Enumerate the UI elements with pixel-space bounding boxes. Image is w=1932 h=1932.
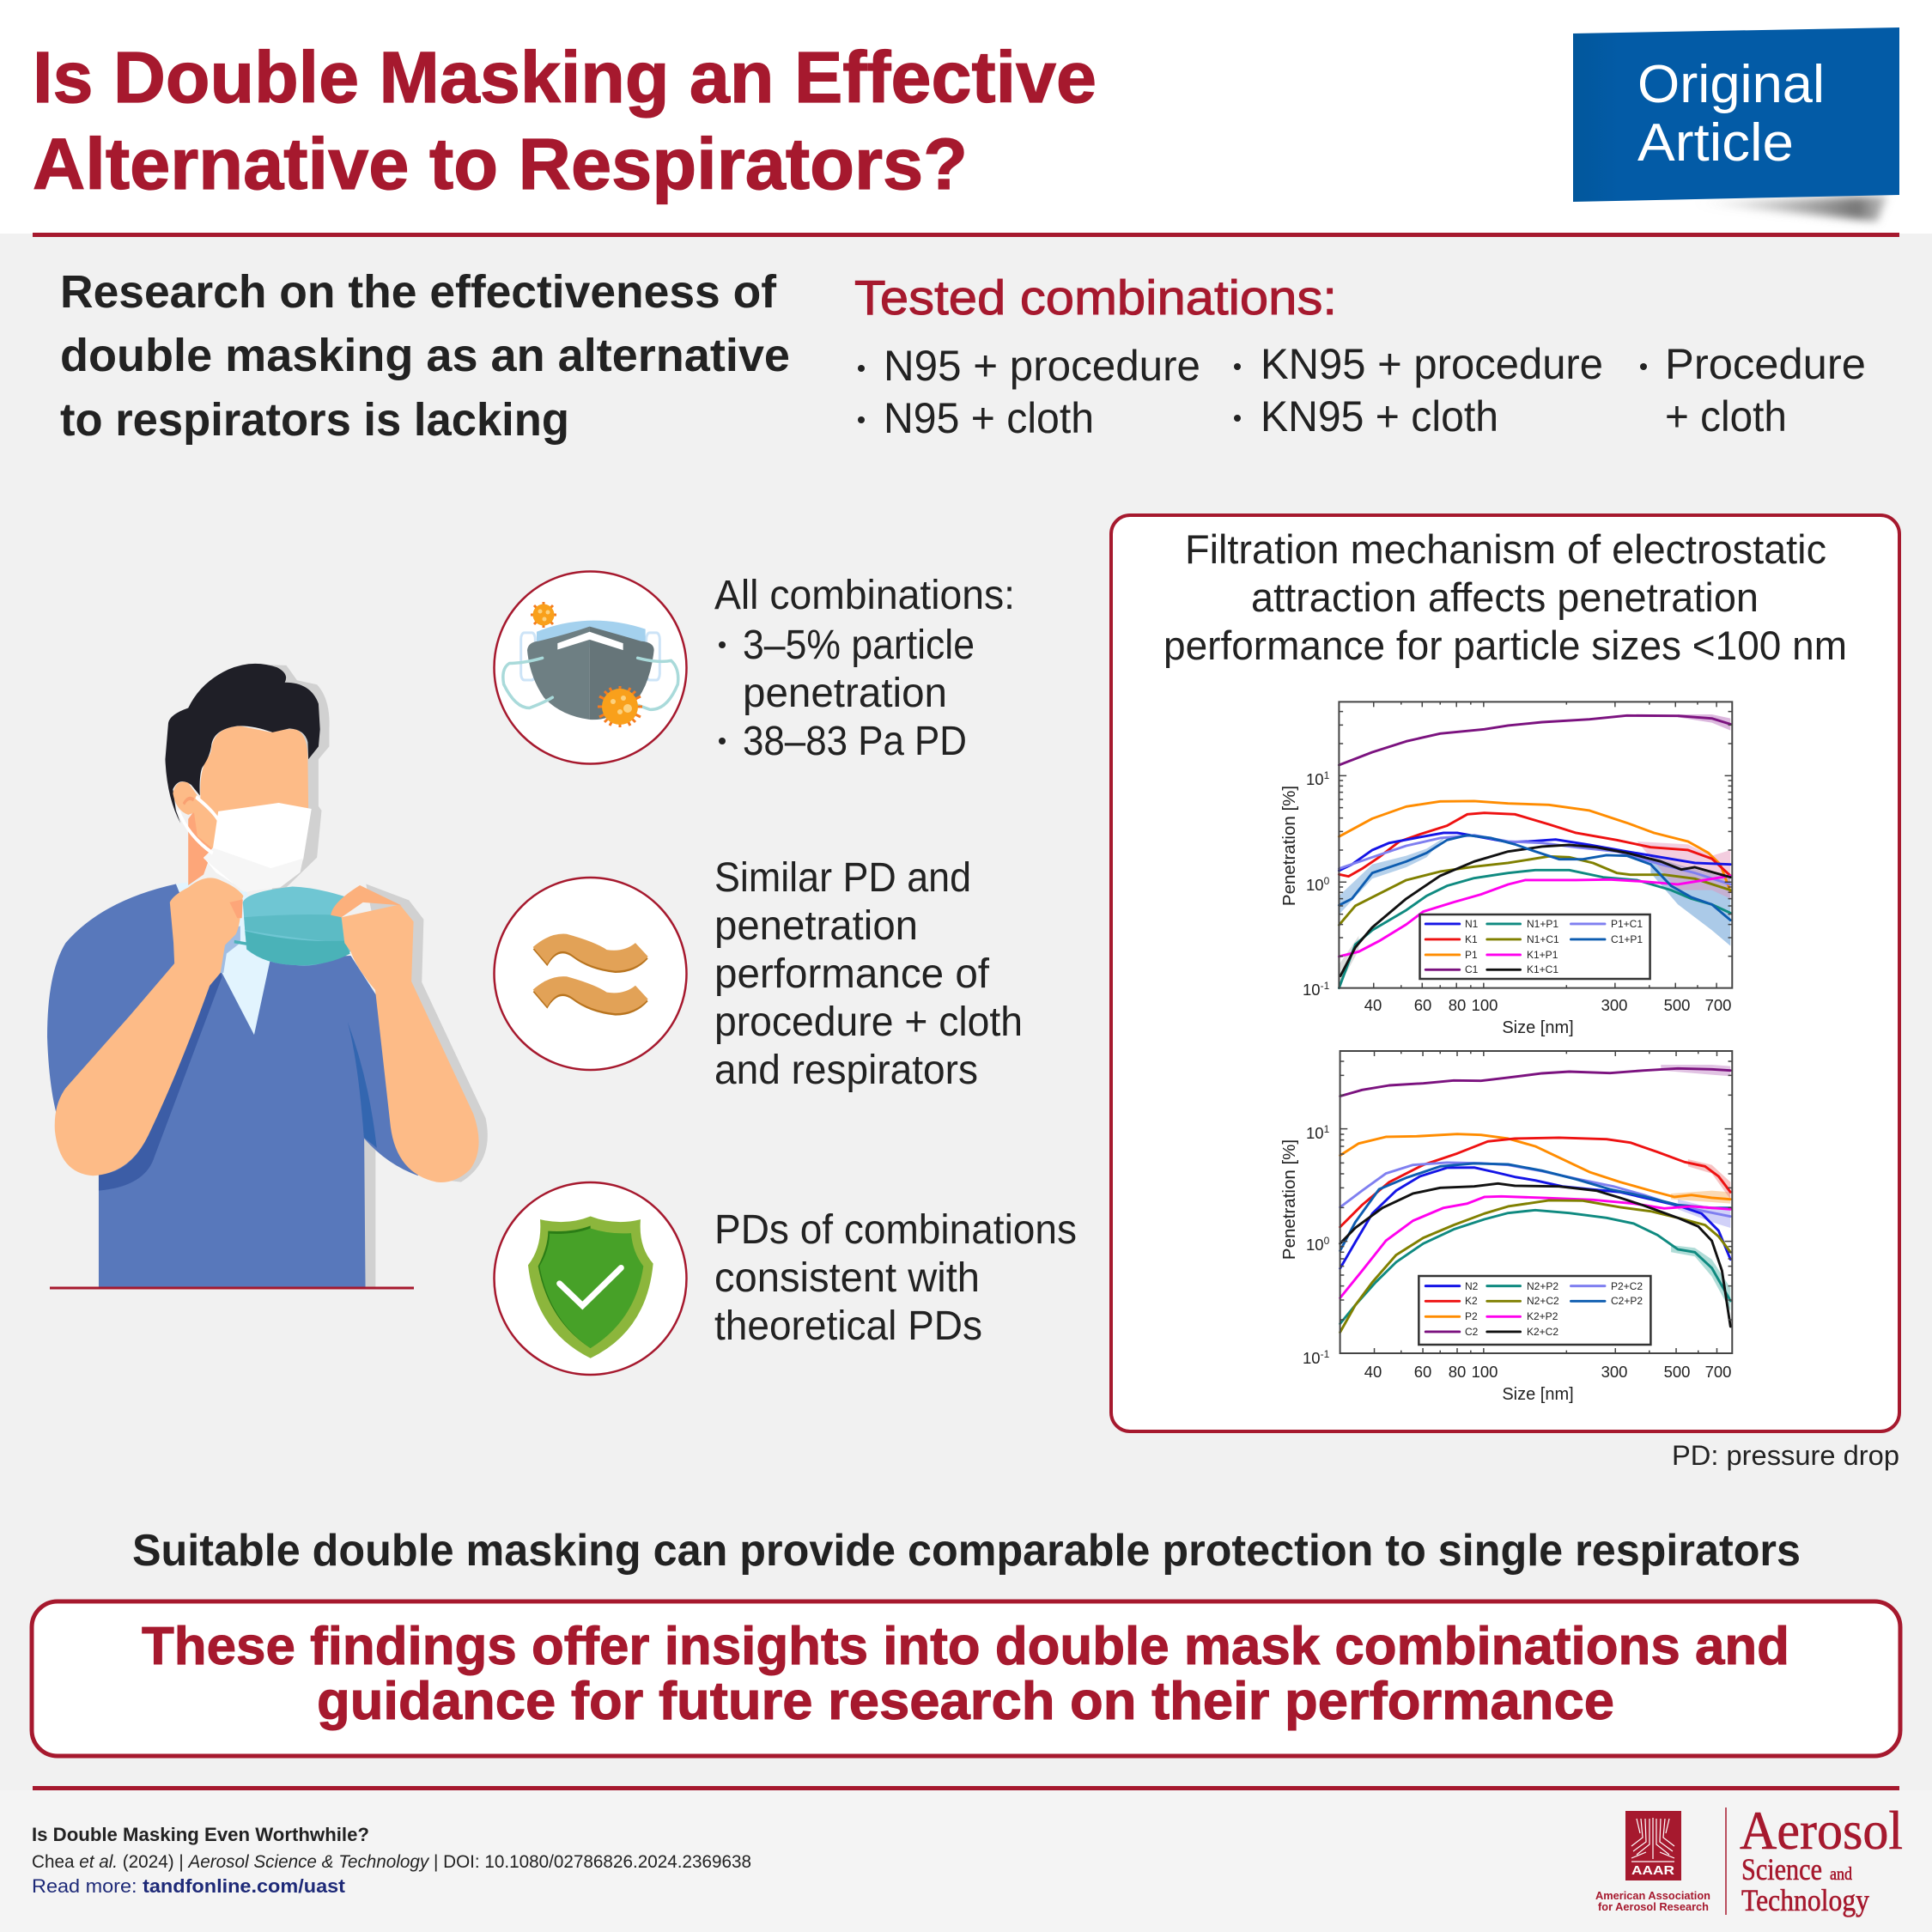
logo: Aerosol Science and Technology bbox=[1740, 1800, 1903, 1917]
list: tested combinations: KN95 + cloth bbox=[1261, 392, 1498, 440]
citation bbox=[32, 1824, 751, 1897]
chart: penetration vs size, set 2: 1 bbox=[1324, 1123, 1330, 1135]
list: tested combinations: N95 + cloth bbox=[884, 394, 1094, 442]
icon: approximately equal bbox=[495, 878, 687, 1070]
chart: penetration vs size, set 1: N1+P1 bbox=[1527, 918, 1558, 930]
panel heading: performance for particle sizes <100 nm bbox=[1163, 623, 1847, 668]
chart: penetration vs size, set 1: 10 bbox=[1306, 770, 1324, 788]
chart: penetration vs size, set 1: 10 bbox=[1303, 981, 1321, 999]
chart: penetration vs size, set 1: 60 bbox=[1414, 996, 1431, 1014]
chart: penetration vs size, set 2: 700 bbox=[1705, 1363, 1731, 1381]
panel heading: Filtration mechanism of electrostatic bbox=[1185, 526, 1826, 572]
chart: penetration vs size, set 1: 1 bbox=[1324, 769, 1330, 781]
citation: Read more: tandfonline.com/uast bbox=[32, 1875, 346, 1897]
icon: shield with check bbox=[495, 1182, 687, 1375]
badge: original article bbox=[1573, 27, 1899, 222]
text: pressure drops bbox=[714, 1207, 1077, 1349]
footnote: abbreviation: PD: pressure drop bbox=[1672, 1440, 1899, 1471]
title: Is Double Masking an Effective bbox=[33, 37, 1097, 118]
text: research gap: to respirators is lacking bbox=[60, 394, 569, 446]
text: pressure drops: PDs of combinations bbox=[714, 1207, 1077, 1253]
citation: Chea et al. (2024) | Aerosol Science & Technology | DOI: 10.1080/02786826.2024.2369638 bbox=[32, 1852, 751, 1872]
chart: penetration vs size, set 1: 500 bbox=[1664, 996, 1690, 1014]
list: tested combinations: N95 + procedure bbox=[884, 342, 1200, 390]
chart: penetration vs size, set 2 bbox=[1279, 1051, 1732, 1404]
chart: penetration vs size, set 1: 300 bbox=[1601, 996, 1627, 1014]
title: Alternative to Respirators? bbox=[33, 124, 968, 204]
text: research gap bbox=[60, 266, 790, 446]
icon: mask with viruses bbox=[495, 572, 687, 764]
chart: penetration vs size, set 2: N2+P2 bbox=[1527, 1280, 1558, 1292]
text: similar performance bbox=[714, 855, 1023, 1093]
chart: penetration vs size, set 1: K1 bbox=[1465, 933, 1478, 945]
chart: penetration vs size, set 1: 0 bbox=[1324, 875, 1330, 887]
chart: penetration vs size, set 1: Size [nm] bbox=[1502, 1018, 1574, 1037]
panel heading bbox=[1163, 526, 1847, 668]
callout: conclusion bbox=[32, 1601, 1900, 1756]
chart: penetration vs size, set 1: K1+C1 bbox=[1527, 963, 1558, 975]
text: research gap: Research on the effectiveness of bbox=[60, 266, 777, 318]
chart: penetration vs size, set 1: C1+P1 bbox=[1611, 933, 1643, 945]
text: similar performance: procedure + cloth bbox=[714, 999, 1023, 1045]
chart: penetration vs size, set 2: 60 bbox=[1414, 1363, 1431, 1381]
text: all combinations: All combinations: bbox=[714, 573, 1015, 618]
chart: penetration vs size, set 2: 80 bbox=[1449, 1363, 1466, 1381]
list: tested combinations: KN95 + procedure bbox=[1261, 340, 1603, 388]
logo: AAAR bbox=[1595, 1811, 1710, 1913]
chart: penetration vs size, set 2: C2+P2 bbox=[1611, 1295, 1643, 1307]
text: similar performance: performance of bbox=[714, 951, 990, 997]
text: all combinations: 3–5% particle bbox=[743, 623, 975, 668]
chart: penetration vs size, set 2: 500 bbox=[1664, 1363, 1690, 1381]
chart: penetration vs size, set 2: 0 bbox=[1324, 1235, 1330, 1247]
chart: penetration vs size, set 1: P1 bbox=[1465, 949, 1478, 961]
chart: penetration vs size, set 2: -1 bbox=[1321, 1348, 1330, 1360]
chart: penetration vs size, set 1: 80 bbox=[1449, 996, 1466, 1014]
chart: penetration vs size, set 1: C1 bbox=[1465, 963, 1479, 975]
chart: penetration vs size, set 1: 700 bbox=[1705, 996, 1731, 1014]
chart: penetration vs size, set 2: K2+C2 bbox=[1527, 1326, 1558, 1338]
illustration: person adjusting double mask bbox=[47, 664, 488, 1287]
chart: penetration vs size, set 2: 10 bbox=[1306, 1236, 1324, 1254]
callout: conclusion: These findings offer insights into double mask combinations and bbox=[142, 1617, 1789, 1676]
chart: penetration vs size, set 2: P2+C2 bbox=[1611, 1280, 1643, 1292]
chart: penetration vs size, set 2: 10 bbox=[1306, 1124, 1324, 1142]
panel heading: attraction affects penetration bbox=[1251, 574, 1759, 620]
chart: penetration vs size, set 1: N1 bbox=[1465, 918, 1479, 930]
panel: filtration charts bbox=[1111, 515, 1899, 1431]
chart: penetration vs size, set 1: 10 bbox=[1306, 876, 1324, 894]
chart: penetration vs size, set 2: K2 bbox=[1465, 1295, 1478, 1307]
chart: penetration vs size, set 2: 40 bbox=[1364, 1363, 1382, 1381]
title bbox=[33, 37, 1097, 204]
logo: Aerosol Science and Technology: Science bbox=[1741, 1852, 1822, 1886]
chart: penetration vs size, set 1 bbox=[1279, 702, 1732, 1037]
list: tested combinations: Procedure bbox=[1665, 340, 1866, 388]
logo: AAAR: American Association bbox=[1595, 1889, 1710, 1902]
chart: penetration vs size, set 2: 100 bbox=[1472, 1363, 1498, 1381]
chart: penetration vs size, set 2: P2 bbox=[1465, 1310, 1478, 1322]
text: research gap: double masking as an alternative bbox=[60, 330, 790, 381]
logo: Aerosol Science and Technology: and bbox=[1830, 1863, 1852, 1884]
chart: penetration vs size, set 2: N2 bbox=[1465, 1280, 1479, 1292]
text: all combinations bbox=[714, 573, 1015, 764]
statement: comparable protection: Suitable double masking can provide comparable protection to single respirators bbox=[132, 1526, 1801, 1576]
callout: conclusion: guidance for future research on their performance bbox=[317, 1672, 1614, 1731]
chart: penetration vs size, set 2: K2+P2 bbox=[1527, 1310, 1558, 1322]
chart: penetration vs size, set 1: 40 bbox=[1364, 996, 1382, 1014]
text: similar performance: Similar PD and bbox=[714, 855, 971, 901]
logo: Aerosol Science and Technology: Aerosol bbox=[1740, 1800, 1903, 1861]
text: similar performance: penetration bbox=[714, 903, 918, 949]
chart: penetration vs size, set 1: -1 bbox=[1321, 980, 1330, 992]
list: tested combinations: + cloth bbox=[1665, 392, 1787, 440]
text: pressure drops: theoretical PDs bbox=[714, 1303, 982, 1349]
text: all combinations: penetration bbox=[743, 671, 947, 716]
chart: penetration vs size, set 2: 10 bbox=[1303, 1349, 1321, 1367]
chart: penetration vs size, set 1: P1+C1 bbox=[1611, 918, 1643, 930]
chart: penetration vs size, set 1: N1+C1 bbox=[1527, 933, 1559, 945]
heading: tested combinations: Tested combinations: bbox=[854, 270, 1337, 325]
chart: penetration vs size, set 1: K1+P1 bbox=[1527, 949, 1558, 961]
logo: AAAR: for Aerosol Research bbox=[1598, 1900, 1709, 1913]
chart: penetration vs size, set 2: Size [nm] bbox=[1502, 1385, 1574, 1404]
chart: penetration vs size, set 2: C2 bbox=[1465, 1326, 1479, 1338]
list: tested combinations bbox=[858, 340, 1866, 442]
chart: penetration vs size, set 1: Penetration [%] bbox=[1279, 786, 1299, 906]
chart: penetration vs size, set 1: 100 bbox=[1472, 996, 1498, 1014]
badge: original article: Article bbox=[1637, 113, 1794, 173]
logo: AAAR: AAAR bbox=[1631, 1863, 1674, 1878]
citation: Is Double Masking Even Worthwhile? bbox=[32, 1824, 369, 1845]
text: pressure drops: consistent with bbox=[714, 1255, 980, 1301]
chart: penetration vs size, set 2: Penetration [%] bbox=[1279, 1139, 1299, 1260]
text: all combinations: 38–83 Pa PD bbox=[743, 719, 967, 764]
chart: penetration vs size, set 2: N2+C2 bbox=[1527, 1295, 1559, 1307]
text: similar performance: and respirators bbox=[714, 1048, 978, 1093]
logo: Aerosol Science and Technology: Technology bbox=[1741, 1883, 1869, 1917]
badge: original article: Original bbox=[1637, 55, 1825, 114]
chart: penetration vs size, set 2: 300 bbox=[1601, 1363, 1627, 1381]
